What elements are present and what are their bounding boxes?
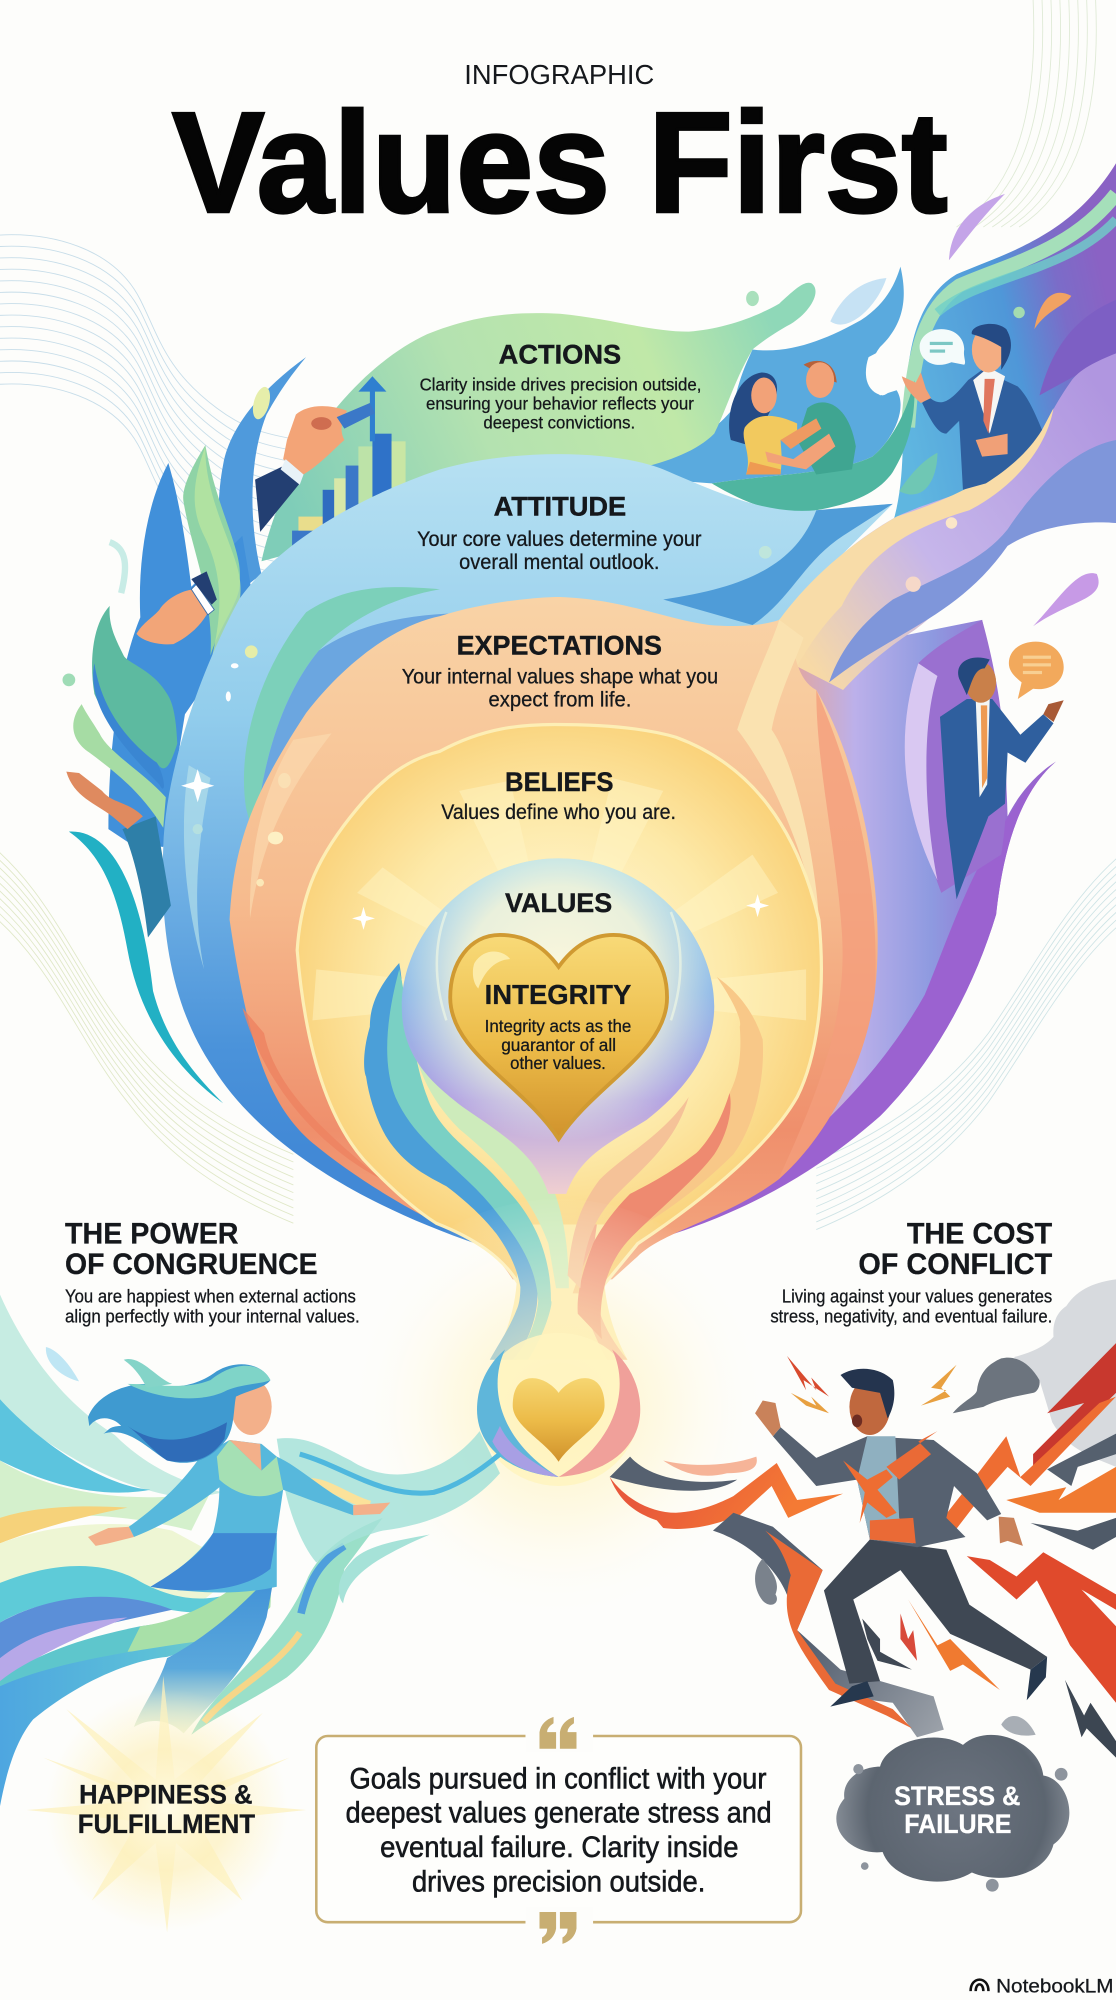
- text: integrity: other values.: [510, 1053, 606, 1073]
- text: the power of congruence: align perfectly with your internal values.: [65, 1306, 360, 1327]
- icon: orange speech bubble: [1009, 642, 1064, 699]
- stem: to lower bulb: [492, 1224, 628, 1360]
- text: the power of congruence: [65, 1218, 360, 1327]
- layer: beliefs: [297, 724, 821, 1293]
- title: Values First: [172, 84, 948, 243]
- quote text: [346, 1762, 772, 1899]
- quote text: deepest values generate stress and: [346, 1797, 772, 1830]
- text: actions: ensuring your behavior reflects your: [426, 393, 694, 413]
- layer: attitude: [163, 454, 893, 1276]
- quote text: Goals pursued in conflict with your: [349, 1762, 767, 1795]
- text: expectations: Your internal values shape what you: [402, 664, 718, 689]
- figure: hand and sleeve placing arrow: [255, 403, 375, 532]
- text: integrity: guarantor of all: [501, 1035, 616, 1055]
- text: attitude: Your core values determine your: [417, 526, 701, 551]
- small label: INFOGRAPHIC: INFOGRAPHIC: [464, 59, 654, 90]
- text: beliefs: Values define who you are.: [441, 799, 676, 824]
- text: beliefs: [441, 767, 676, 824]
- figure: couple shaking hands: [729, 361, 856, 474]
- text: attitude: overall mental outlook.: [459, 549, 659, 574]
- label: happiness and fulfillment: HAPPINESS &: [79, 1780, 253, 1810]
- icon: closing quote: [540, 1912, 576, 1944]
- lower bulb with small heart: [477, 1333, 640, 1486]
- sunburst: happiness: [27, 1676, 306, 1932]
- lightning bolts: [787, 1343, 1116, 1758]
- text: the cost of conflict: stress, negativity, and eventual failure.: [770, 1306, 1052, 1327]
- figure: joyful woman: [88, 1359, 390, 1592]
- icon: opening quote: [540, 1717, 576, 1749]
- cloud: stress and failure: [836, 1716, 1069, 1892]
- text: the cost of conflict: [770, 1218, 1052, 1327]
- figure: lower reaching hand and teal leaf: [66, 772, 223, 1103]
- label: happiness and fulfillment: [78, 1780, 256, 1839]
- text: integrity: INTEGRITY: [485, 979, 632, 1010]
- quote box: [316, 1717, 801, 1944]
- blue backdrop behind couple: [561, 267, 904, 483]
- stream: right purple body: [561, 620, 1056, 1244]
- ribbons: right conflict flows: [610, 1457, 944, 1737]
- label: stress and failure: FAILURE: [904, 1809, 1011, 1839]
- figure: second businessman: [940, 658, 1064, 899]
- label: stress and failure: [894, 1781, 1020, 1839]
- stream: upper right wave: [893, 163, 1116, 536]
- left leaves: [62, 357, 306, 847]
- figure: open hand: [136, 571, 217, 644]
- flows: teal and blue to stem, left: [364, 963, 569, 1360]
- text: the power of congruence: OF CONGRUENCE: [65, 1248, 318, 1281]
- glow: lower heart: [342, 1199, 775, 1620]
- label: stress and failure: STRESS &: [894, 1781, 1020, 1811]
- text: the power of congruence: You are happiest when external actions: [65, 1285, 356, 1306]
- text: integrity: [485, 979, 632, 1073]
- quote text: drives precision outside.: [412, 1866, 705, 1899]
- text: expectations: EXPECTATIONS: [457, 630, 662, 660]
- text: attitude: [417, 491, 701, 574]
- gray smoke clouds: [953, 1279, 1116, 1467]
- layer: expectations: [230, 597, 878, 1279]
- text: the cost of conflict: OF CONFLICT: [858, 1248, 1052, 1281]
- quote text: eventual failure. Clarity inside: [380, 1831, 738, 1864]
- label: happiness and fulfillment: FULFILLMENT: [78, 1809, 256, 1839]
- text: actions: [420, 340, 701, 433]
- figure: running stressed man: [755, 1369, 1047, 1707]
- text: beliefs: BELIEFS: [505, 767, 613, 797]
- text: actions: deepest convictions.: [483, 413, 635, 433]
- text: the power of congruence: THE POWER: [65, 1218, 239, 1251]
- sphere: values: [402, 858, 714, 1194]
- figure: businessman with speech bubble: [902, 324, 1042, 490]
- text: expectations: expect from life.: [488, 687, 631, 712]
- text: attitude: ATTITUDE: [494, 491, 626, 521]
- bowl under couple: [712, 380, 915, 512]
- droplets above the actions band: [746, 278, 898, 395]
- text: integrity: Integrity acts as the: [485, 1016, 631, 1036]
- ribbons: left flows: [0, 1295, 500, 1806]
- heart: integrity: [450, 935, 667, 1139]
- layer: actions: [261, 283, 816, 561]
- icon: white speech bubble: [920, 329, 965, 365]
- text: expectations: [402, 630, 718, 712]
- text: values: VALUES: [505, 888, 612, 918]
- text: the cost of conflict: Living against your values generates: [782, 1285, 1052, 1306]
- watermark: NotebookLM: NotebookLM: [996, 1976, 1113, 1997]
- text: actions: Clarity inside drives precision outside,: [420, 374, 701, 394]
- stream: right lavender ribbons: [778, 353, 1116, 702]
- text: actions: ACTIONS: [499, 340, 621, 370]
- icon: growth staircase with arrow: [292, 376, 406, 577]
- flows: coral to stem, right: [568, 977, 763, 1339]
- text: the cost of conflict: THE COST: [907, 1218, 1052, 1251]
